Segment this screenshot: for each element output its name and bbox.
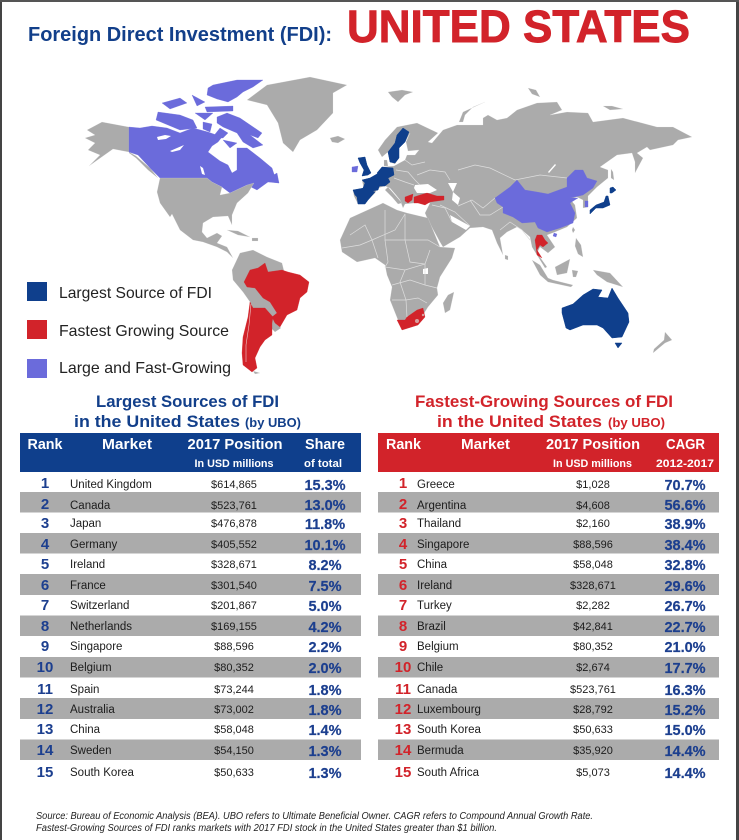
row: Japan: Japan	[70, 518, 101, 530]
table header: largest sources: Rank	[28, 436, 63, 453]
row: South Korea: 15	[37, 764, 53, 781]
row: Luxembourg	[395, 701, 706, 719]
row: Greece	[399, 475, 706, 494]
row: France: 6	[41, 577, 49, 594]
map: North America	[85, 77, 347, 258]
row: Brazil	[399, 618, 706, 636]
row: Turkey: Turkey	[417, 600, 452, 612]
row: Belgium: 21.0%	[664, 640, 706, 656]
panel: fastest-growing sources table	[378, 393, 719, 782]
table header: largest sources: of total	[304, 458, 342, 470]
row: Australia: $73,002	[214, 704, 254, 716]
row: Canada: 13.0%	[304, 498, 346, 514]
row: China: $58,048	[573, 559, 613, 571]
row: Bermuda: Bermuda	[417, 745, 464, 757]
row: Thailand: 3	[399, 515, 407, 532]
row: Ireland	[41, 556, 342, 574]
row: Australia	[37, 701, 342, 719]
row: Sweden	[37, 742, 342, 760]
row: United Kingdom: $614,865	[211, 479, 257, 491]
row: Ireland: 5	[41, 556, 49, 573]
row: Japan: $476,878	[211, 518, 257, 530]
row: Singapore: 38.4%	[664, 538, 706, 554]
row: Thailand: Thailand	[417, 518, 461, 530]
row: Australia: 12	[37, 701, 53, 718]
row: Singapore: Singapore	[417, 539, 469, 551]
legend item: Largest Source of FDI: Largest Source of FDI	[59, 285, 212, 302]
table header: fastest-growing sources: 2017 Position	[546, 436, 640, 453]
row: Switzerland: 7	[41, 597, 49, 614]
row: Turkey: 7	[399, 597, 407, 614]
row: Ireland: $328,671	[211, 559, 257, 571]
table header: fastest-growing sources	[378, 433, 719, 472]
heading: fastest-growing sources: Fastest-Growing Sources of FDI	[415, 393, 673, 411]
row: Argentina: Argentina	[417, 500, 467, 512]
row: Switzerland: 5.0%	[308, 599, 342, 615]
table header: fastest-growing sources: 2012-2017	[656, 458, 714, 470]
row: China: China	[417, 559, 448, 571]
row: Belgium	[37, 659, 342, 677]
row: France: France	[70, 580, 106, 592]
table header: largest sources: In USD millions	[194, 458, 274, 470]
map: Australia and New Zealand	[562, 288, 672, 353]
row: Chile: 17.7%	[664, 661, 706, 677]
row: France	[41, 577, 342, 595]
row: South Korea: 15.0%	[664, 723, 706, 739]
row: China: 5	[399, 556, 407, 573]
row: France: $301,540	[211, 580, 257, 592]
row: Switzerland	[41, 597, 342, 615]
source note: Source: Bureau of Economic Analysis (BEA). UBO refers to Ultimate Beneficial Owner. CAGR refers to Compound Annual Growth Rate.	[36, 811, 593, 822]
row: Singapore: Singapore	[70, 641, 122, 653]
row: Ireland	[399, 577, 706, 595]
row: Sweden: 14	[37, 742, 54, 759]
row: Belgium: 10	[37, 659, 53, 676]
row: United Kingdom: 1	[41, 475, 49, 492]
row: Japan	[41, 515, 345, 533]
row: Argentina: 56.6%	[664, 498, 706, 514]
heading: largest sources: in the United States	[74, 413, 240, 431]
row: Argentina	[399, 496, 706, 514]
row: Netherlands	[41, 618, 342, 636]
row: Bermuda: $35,920	[573, 745, 613, 757]
table header: largest sources: 2017 Position	[188, 436, 282, 453]
title: United States: UNITED STATES	[347, 1, 690, 52]
row: Ireland: Ireland	[70, 559, 105, 571]
row: Chile	[395, 659, 706, 677]
world map	[85, 77, 692, 374]
row: Australia: 1.8%	[308, 703, 342, 719]
row: Canada: Canada	[70, 500, 111, 512]
row: Luxembourg: $28,792	[573, 704, 613, 716]
row: Sweden: Sweden	[70, 745, 112, 757]
row: Canada: $523,761	[570, 684, 616, 696]
map: Fastest growing countries in Eurasia	[405, 193, 548, 258]
row: Spain: Spain	[70, 684, 99, 696]
row: Bermuda: 14.4%	[664, 744, 706, 760]
row: Turkey	[399, 597, 706, 615]
table header: fastest-growing sources: Rank	[386, 436, 422, 453]
row: Germany: $405,552	[211, 539, 257, 551]
row: Greece: $1,028	[576, 479, 610, 491]
row: Spain	[37, 681, 342, 699]
row: Thailand: $2,160	[576, 518, 610, 530]
table header: fastest-growing sources: CAGR	[666, 436, 705, 453]
row: Spain: $73,244	[214, 684, 254, 696]
legend item: Fastest Growing Source: Fastest Growing Source	[59, 323, 229, 340]
row: Switzerland: Switzerland	[70, 600, 129, 612]
row: Canada: 16.3%	[664, 683, 706, 699]
source note	[36, 811, 593, 834]
row: China: 13	[37, 721, 53, 738]
row: Canada	[41, 496, 346, 514]
map: Large and fast-growing countries in Asia and Ireland	[352, 166, 597, 237]
row: South Africa: 15	[395, 764, 411, 781]
row: China: 1.4%	[308, 723, 342, 739]
heading: largest sources: (by UBO)	[245, 415, 301, 430]
row: South Korea: 1.3%	[308, 766, 342, 782]
row: Canada: 11	[395, 681, 411, 698]
row: Belgium: $80,352	[214, 662, 254, 674]
row: Germany: 4	[41, 536, 50, 553]
table rows: largest sources	[20, 475, 361, 782]
heading: fastest-growing sources: (by UBO)	[608, 415, 665, 430]
row: Luxembourg: Luxembourg	[417, 704, 481, 716]
map: Eurasia	[330, 88, 692, 287]
row: China: China	[70, 724, 101, 736]
row: Singapore	[399, 536, 706, 554]
row: Singapore: 9	[41, 638, 49, 655]
row: Greece: 70.7%	[664, 478, 706, 494]
row: Sweden: 1.3%	[308, 744, 342, 760]
row: Singapore: 2.2%	[308, 640, 342, 656]
row: Ireland: 8.2%	[308, 558, 342, 574]
row: Ireland: Ireland	[417, 580, 452, 592]
row: South Korea	[37, 764, 342, 782]
row: South Korea: $50,633	[573, 724, 613, 736]
row: Spain: 1.8%	[308, 683, 342, 699]
heading: fastest-growing sources	[415, 393, 673, 431]
row: Canada: $523,761	[211, 500, 257, 512]
row: Argentina: $4,608	[576, 500, 610, 512]
row: Netherlands: 4.2%	[308, 620, 342, 636]
heading: Foreign Direct Investment (FDI): Foreign Direct Investment (FDI):	[28, 23, 332, 46]
row: South Africa: South Africa	[417, 767, 480, 779]
row: Turkey: 26.7%	[664, 599, 706, 615]
table header: largest sources	[20, 433, 361, 472]
legend item: Largest Source of FDI	[27, 282, 212, 302]
row: Japan: 11.8%	[305, 517, 345, 533]
row: Thailand: 38.9%	[664, 517, 706, 533]
row: France: 7.5%	[308, 579, 342, 595]
row: Ireland: $328,671	[570, 580, 616, 592]
legend	[27, 282, 231, 378]
row: Brazil: Brazil	[417, 621, 446, 633]
legend item: Large and Fast-Growing: Large and Fast-Growing	[59, 360, 231, 377]
row: South Korea	[395, 721, 706, 739]
row: Luxembourg: 12	[395, 701, 411, 718]
row: Ireland: 29.6%	[664, 579, 706, 595]
heading: fastest-growing sources: in the United States	[437, 413, 602, 431]
row: Brazil: 8	[399, 618, 407, 635]
row: Australia: Australia	[70, 704, 115, 716]
table header: largest sources: Share	[305, 436, 345, 453]
row: South Korea: South Korea	[70, 767, 135, 779]
row: China	[399, 556, 706, 574]
row: Luxembourg: 15.2%	[664, 703, 706, 719]
map: Africa	[340, 203, 455, 330]
row: Bermuda	[395, 742, 706, 760]
row: Brazil: $42,841	[573, 621, 613, 633]
row: Singapore	[41, 638, 342, 656]
row: Netherlands: Netherlands	[70, 621, 132, 633]
row: Switzerland: $201,867	[211, 600, 257, 612]
panel: largest sources table	[20, 393, 361, 782]
table rows: fastest-growing sources	[378, 475, 719, 782]
row: Chile: Chile	[417, 662, 443, 674]
map: South America	[232, 250, 309, 374]
table header: fastest-growing sources: Market	[461, 436, 510, 453]
row: Chile: 10	[395, 659, 411, 676]
table header: fastest-growing sources: In USD millions	[553, 458, 632, 470]
row: United Kingdom	[41, 475, 346, 494]
row: South Korea: $50,633	[214, 767, 254, 779]
row: United Kingdom: 15.3%	[304, 478, 346, 494]
row: Japan: 3	[41, 515, 49, 532]
row: China: $58,048	[214, 724, 254, 736]
row: South Korea: South Korea	[417, 724, 482, 736]
row: Belgium	[399, 638, 706, 656]
table header: largest sources: Market	[102, 436, 152, 453]
row: Greece: Greece	[417, 479, 455, 491]
row: Greece: 1	[399, 475, 407, 492]
row: Bermuda: 14	[395, 742, 412, 759]
row: South Korea: 13	[395, 721, 411, 738]
row: Spain: 11	[37, 681, 53, 698]
row: Canada: 2	[41, 496, 49, 513]
row: Belgium: Belgium	[70, 662, 112, 674]
row: China	[37, 721, 342, 739]
row: Netherlands: 8	[41, 618, 49, 635]
row: Belgium: $80,352	[573, 641, 613, 653]
row: Belgium: 2.0%	[308, 661, 342, 677]
row: United Kingdom: United Kingdom	[70, 479, 152, 491]
row: Germany: 10.1%	[304, 538, 346, 554]
row: China: 32.8%	[664, 558, 706, 574]
row: Germany: Germany	[70, 539, 118, 551]
row: South Africa: 14.4%	[664, 766, 706, 782]
source note: Fastest-Growing Sources of FDI ranks markets with 2017 FDI stock in the United States greater than $1 billion.	[36, 823, 497, 834]
row: Canada	[395, 681, 706, 699]
row: Germany	[41, 536, 346, 554]
row: South Africa	[395, 764, 706, 782]
row: South Africa: $5,073	[576, 767, 610, 779]
row: Netherlands: $169,155	[211, 621, 257, 633]
row: Argentina: 2	[399, 496, 407, 513]
row: Sweden: $54,150	[214, 745, 254, 757]
row: Brazil: 22.7%	[664, 620, 706, 636]
row: Ireland: 6	[399, 577, 407, 594]
map: Largest source countries in Europe and Japan	[353, 128, 616, 214]
row: Singapore: 4	[399, 536, 408, 553]
heading: largest sources	[74, 393, 301, 431]
row: Thailand	[399, 515, 706, 533]
row: Singapore: $88,596	[214, 641, 254, 653]
row: Singapore: $88,596	[573, 539, 613, 551]
row: Canada: Canada	[417, 684, 458, 696]
row: Turkey: $2,282	[576, 600, 610, 612]
row: Chile: $2,674	[576, 662, 610, 674]
row: Belgium: 9	[399, 638, 407, 655]
row: Belgium: Belgium	[417, 641, 459, 653]
heading: largest sources: Largest Sources of FDI	[96, 393, 279, 411]
